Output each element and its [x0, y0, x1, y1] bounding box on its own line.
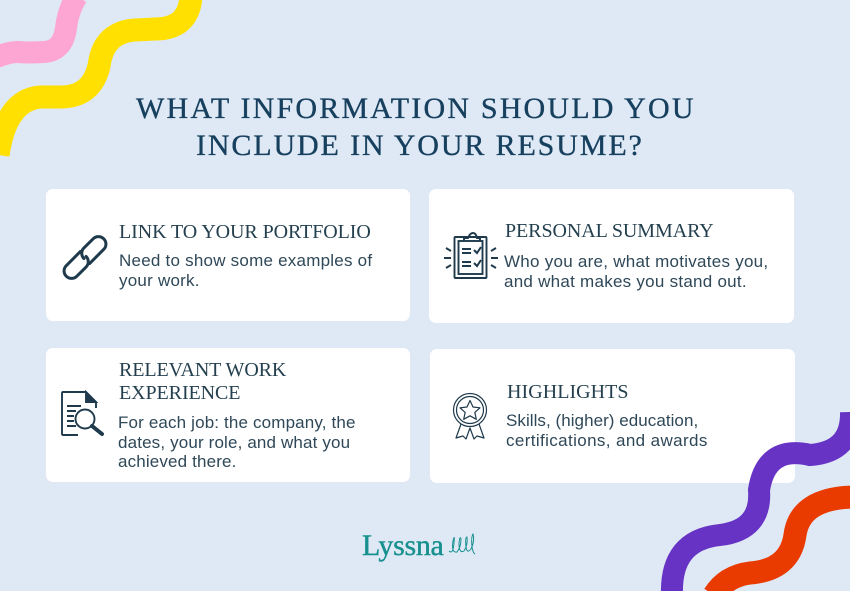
body text: and what makes you stand out. [504, 272, 747, 290]
body text: Skills, (higher) education, [506, 411, 698, 430]
body text: certifications, and awards [506, 430, 708, 450]
body text: Need to show some examples of [119, 251, 372, 270]
body text: For each job: the company, the [118, 413, 356, 432]
logo wordmark: Lyssna [362, 529, 444, 562]
logo scribble [448, 533, 476, 554]
body text [504, 252, 768, 290]
title: INCLUDE IN YOUR RESUME? [196, 129, 644, 162]
panel: relevant work experience [46, 348, 410, 482]
heading: HIGHLIGHTS [507, 381, 629, 403]
body text: achieved there. [118, 452, 236, 471]
body text [118, 413, 356, 471]
logo: Lyssna [362, 529, 476, 562]
heading: EXPERIENCE [119, 382, 240, 404]
icon: document with magnifier [61, 390, 104, 436]
body text [506, 411, 708, 450]
panel: personal summary [429, 189, 794, 323]
heading [119, 359, 286, 404]
body text: dates, your role, and what you [118, 432, 350, 452]
icon: clipboard checklist [444, 232, 498, 279]
body text: your work. [119, 270, 200, 290]
icon: award ribbon [452, 392, 488, 440]
heading: PERSONAL SUMMARY [505, 220, 714, 242]
body text [119, 251, 372, 290]
heading: LINK TO YOUR PORTFOLIO [119, 221, 371, 243]
panel: link to your portfolio [46, 189, 410, 321]
title [136, 92, 696, 162]
body text: Who you are, what motivates you, [504, 252, 768, 271]
title: WHAT INFORMATION SHOULD YOU [136, 92, 696, 125]
icon: chain link [62, 235, 108, 280]
heading: RELEVANT WORK [119, 359, 286, 381]
panel: highlights [430, 349, 795, 483]
